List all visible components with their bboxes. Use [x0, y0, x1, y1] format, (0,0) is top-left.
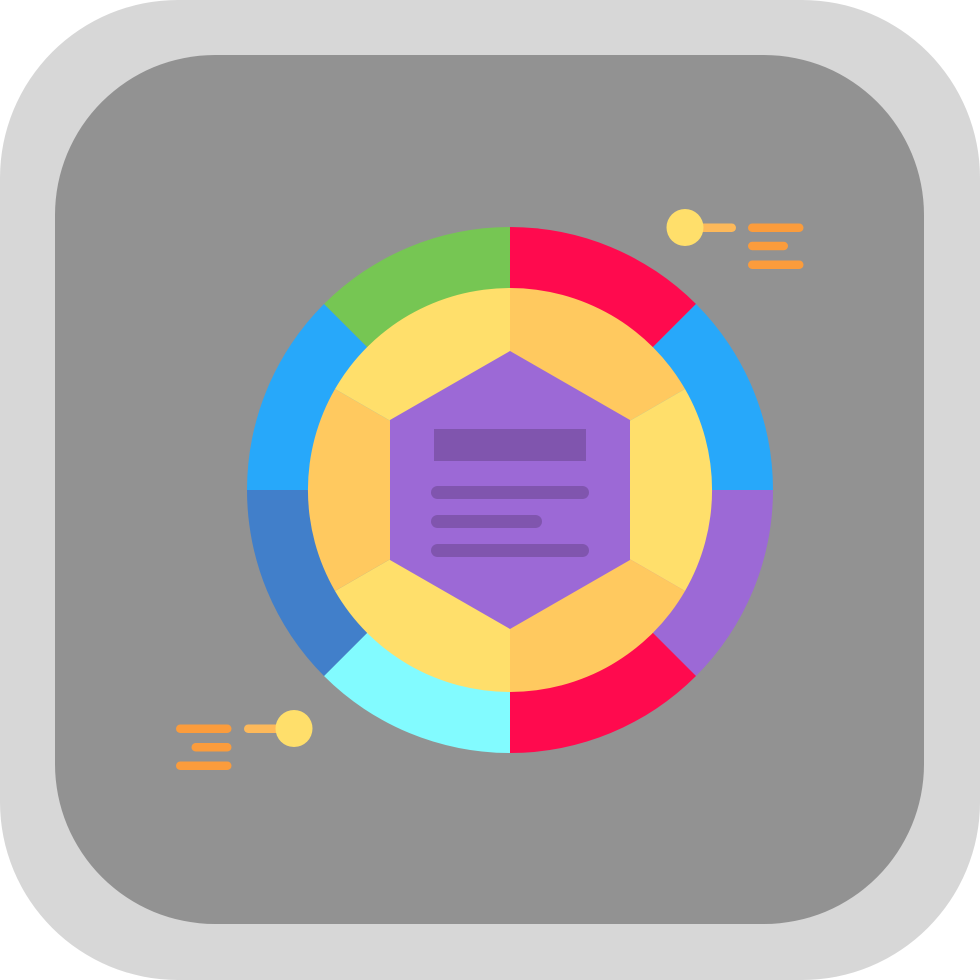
outer ring segment: green — [324, 227, 510, 490]
callout dot — [276, 710, 312, 747]
connector line — [695, 224, 736, 232]
inner disc segment: yellow bottom left — [335, 490, 510, 692]
inner disc segment: orange left — [308, 389, 510, 591]
hexagon title bar — [434, 429, 586, 461]
inner disc segment: orange bottom right — [510, 490, 685, 692]
hexagon text line 3 — [431, 544, 589, 557]
connector line — [244, 724, 285, 733]
outer ring segment: purple right — [510, 490, 773, 676]
callout: bottom left — [176, 710, 312, 770]
outer ring segment: blue upper right — [510, 304, 773, 490]
center hexagon — [390, 351, 630, 629]
inner grey panel — [55, 55, 924, 924]
callout text lines — [176, 724, 232, 770]
callout: top right — [666, 209, 804, 269]
outer ring segment: blue upper left — [247, 304, 510, 490]
inner disc segment: orange top right — [510, 288, 685, 490]
callout text lines — [748, 224, 804, 269]
outer ring segment: cyan bottom — [324, 490, 510, 753]
outer ring segment: red bottom — [510, 490, 696, 753]
callout dot — [666, 209, 704, 246]
hexagon text line 2 — [431, 515, 542, 528]
inner disc segment: yellow right — [510, 389, 712, 591]
outer ring segment: red top — [510, 227, 696, 490]
inner disc segment: yellow top left — [335, 288, 510, 490]
hexagon text line 1 — [431, 486, 589, 499]
ring chart — [247, 227, 773, 753]
outer ring segment: dark blue left — [247, 490, 510, 676]
